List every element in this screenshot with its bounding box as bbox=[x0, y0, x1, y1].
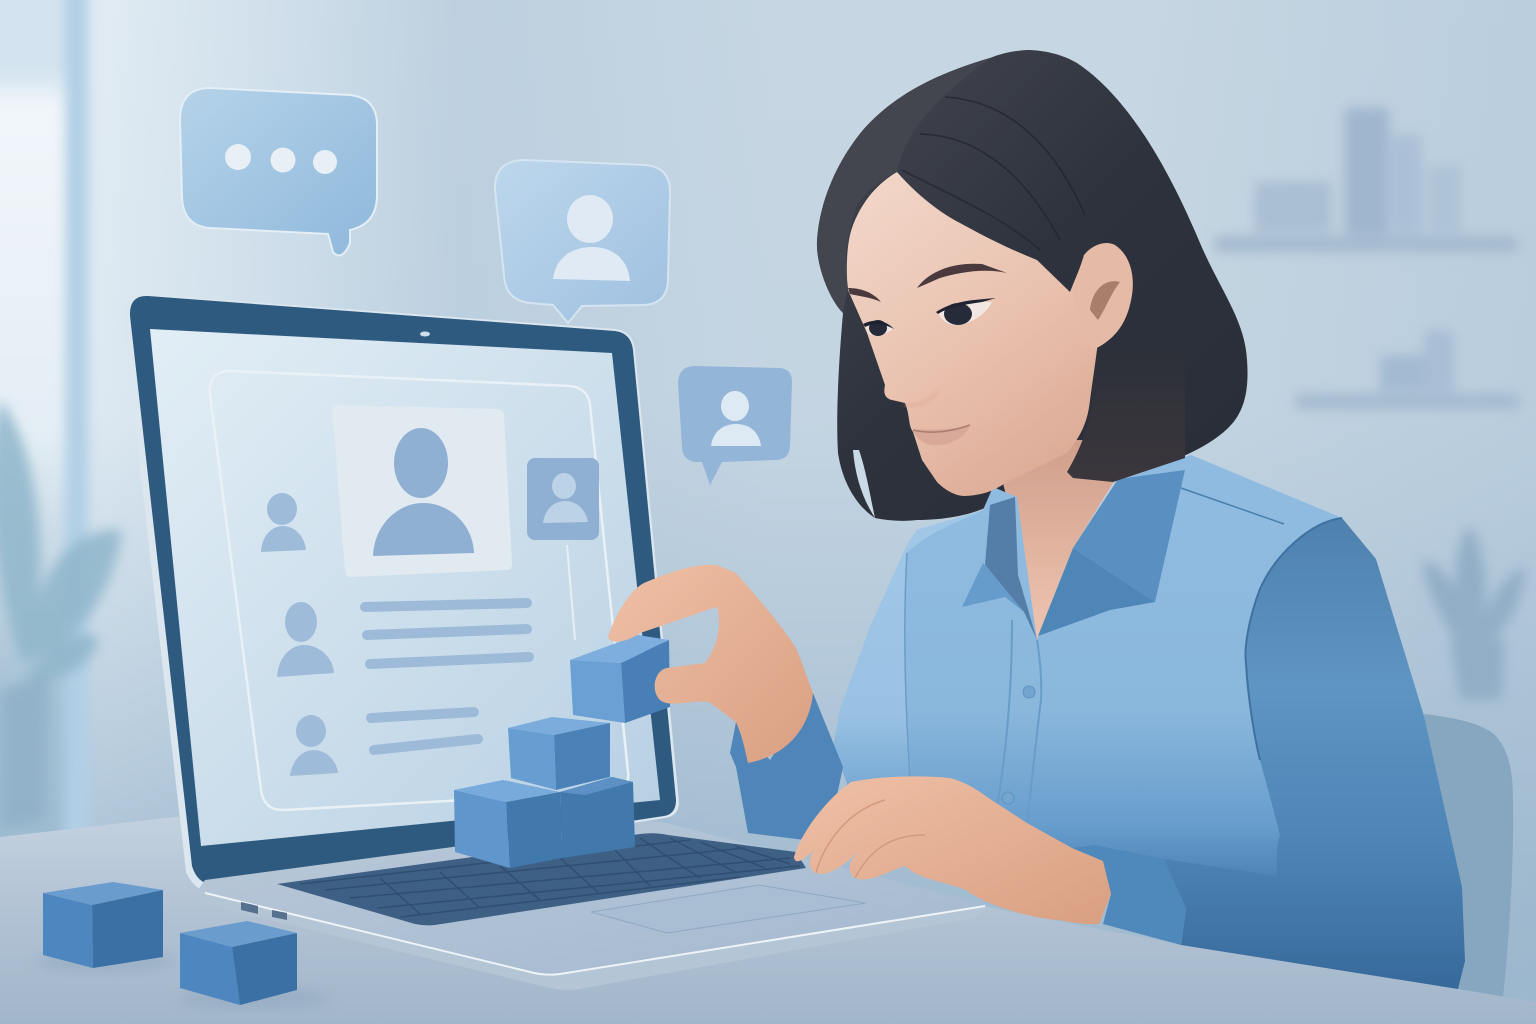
collar inner right bbox=[1038, 548, 1155, 636]
loose block 1 bbox=[35, 882, 175, 972]
woman bbox=[608, 50, 1465, 989]
right arm seam bbox=[1246, 518, 1342, 760]
right cuff bbox=[1072, 845, 1186, 945]
laptop screen bbox=[150, 329, 660, 846]
avatar list item 3 bbox=[290, 715, 338, 776]
keyboard bbox=[277, 833, 806, 925]
background plant left bbox=[0, 400, 122, 830]
block: bottom right bbox=[560, 777, 635, 858]
upper hand bbox=[608, 565, 813, 763]
hair strands bbox=[902, 97, 1085, 250]
connector line bbox=[567, 545, 575, 640]
hair highlight gap bbox=[853, 450, 875, 518]
hair front right bbox=[897, 58, 1170, 292]
shirt yoke seam bbox=[1181, 488, 1284, 524]
typing dots bbox=[225, 144, 337, 174]
shirt placket bbox=[997, 620, 1041, 823]
background window bbox=[0, 0, 88, 880]
left arm seam bbox=[905, 553, 910, 777]
text placeholder lines bbox=[365, 603, 529, 750]
profile card bbox=[332, 405, 512, 577]
laptop bbox=[123, 294, 989, 990]
chat bubble: dots bbox=[180, 88, 377, 255]
right sleeve bbox=[1164, 518, 1465, 989]
finger creases bbox=[816, 800, 925, 878]
laptop lid bbox=[123, 294, 679, 892]
lower hair lock bbox=[1067, 345, 1185, 482]
chat bubble: profile large bbox=[495, 160, 670, 323]
shirt body bbox=[833, 455, 1342, 900]
loose block 2 bbox=[180, 921, 330, 1008]
neck bbox=[990, 440, 1125, 640]
chat bubble: profile small bbox=[678, 366, 792, 485]
collar right bbox=[1073, 470, 1185, 602]
collar inner left bbox=[985, 497, 1037, 640]
avatar bbox=[711, 391, 761, 446]
shirt buttons bbox=[1002, 686, 1035, 804]
face bbox=[847, 172, 1100, 496]
block: middle bbox=[508, 717, 610, 790]
laptop base bbox=[200, 822, 989, 990]
background shelves bbox=[1214, 108, 1520, 409]
block: held bbox=[570, 635, 670, 723]
background plant right bbox=[1424, 525, 1525, 700]
avatar list item 2 bbox=[277, 602, 334, 677]
table bbox=[0, 817, 1536, 1024]
nose shadow bbox=[905, 392, 938, 405]
trackpad bbox=[591, 885, 866, 933]
block: bottom left bbox=[454, 780, 562, 868]
ear bbox=[1072, 243, 1133, 350]
eyebrows bbox=[848, 264, 1007, 302]
ports bbox=[241, 902, 287, 920]
eye left bbox=[863, 320, 894, 336]
collar left bbox=[962, 563, 1024, 612]
screen panel outline bbox=[210, 371, 628, 810]
eye right bbox=[936, 298, 996, 325]
chair bbox=[1424, 714, 1513, 998]
avatar large bbox=[373, 428, 474, 556]
avatar list item 1 bbox=[261, 493, 306, 552]
left cuff bbox=[730, 693, 843, 840]
left arm light bbox=[833, 510, 983, 783]
avatar bbox=[553, 195, 630, 281]
hair back bbox=[817, 50, 1248, 521]
block stack bbox=[454, 635, 670, 868]
small profile card bbox=[527, 458, 599, 540]
lower hand bbox=[794, 776, 1111, 924]
lips bbox=[913, 425, 970, 445]
hair front left bbox=[817, 58, 990, 313]
